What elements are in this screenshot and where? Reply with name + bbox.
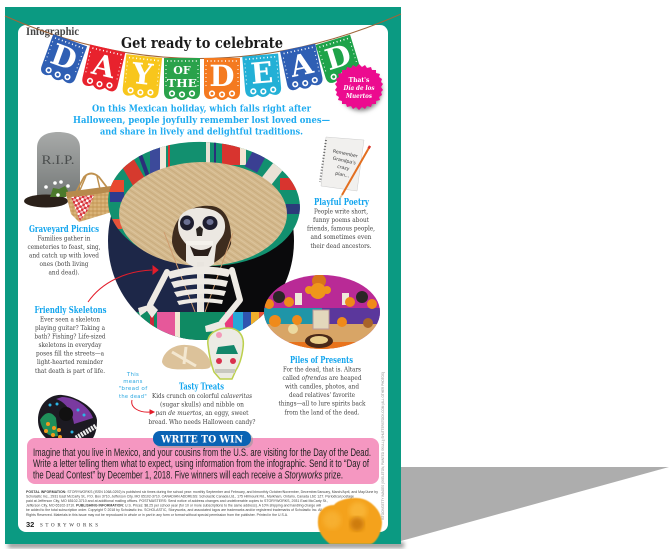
section: Graveyard Picnics: and dead).	[48, 268, 80, 276]
sombrero straw	[119, 162, 287, 266]
handwritten note: bread of the dead: "bread of	[118, 386, 148, 392]
section: Friendly Skeletons: Friendly Skeletons	[34, 306, 106, 316]
banner string	[5, 14, 401, 59]
section: Playful Poetry: friends, famous people,	[307, 224, 375, 232]
circle background	[108, 142, 294, 340]
contest box: the Dead Contest” by December 1, 2018. Five winners will each receive a Storyworks prize.	[33, 470, 343, 482]
illustration: notebook and pencil: Grandpa's	[332, 156, 357, 167]
illustration: painted sugar skull	[38, 395, 97, 445]
photo: pan de muerto bread	[162, 345, 211, 369]
flag D	[316, 35, 362, 85]
intro text: and share in lively and delightful traditions.	[100, 126, 303, 138]
badge: That's Dia de los Muertos: Muertos	[345, 93, 373, 100]
intro text: On this Mexican holiday, which falls right after	[92, 104, 312, 114]
section: Friendly Skeletons: Ever seen a skeleton	[40, 316, 101, 324]
section: Friendly Skeletons: playing guitar? Taking a	[35, 324, 105, 332]
flag E	[242, 54, 282, 98]
postal information: POSTAL INFORMATION: STORYWORKS (ISSN 1068-0292) is published six times during the school year: monthly September and February, and bimonthly October/November, December/January, March/April, and May/June by	[26, 490, 378, 494]
spine and ribs	[197, 262, 204, 312]
contest box: Write a letter telling them what to expect, using information from the infographic. Send it to “Day of	[33, 458, 369, 470]
illustration: marigold flower	[318, 498, 382, 544]
flag OF THE: THE	[167, 77, 197, 90]
section: Playful Poetry: and sometimes even	[310, 233, 372, 241]
skeleton	[138, 208, 240, 336]
section: Friendly Skeletons: that death is part of life.	[35, 367, 105, 375]
sombrero serape brim	[108, 142, 300, 266]
postal information: paid at Jefferson City, MO 65102-3710 and at additional mailing offices. POSTMASTERS: Send notice of address changes and undeliverable copies to STORYWORKS, 2931 East McCarty St.,	[26, 499, 328, 503]
basket	[76, 174, 109, 192]
photo: ofrenda altar	[264, 275, 380, 349]
postal information: Jefferson City, MO 65102-3710. PUBLISHING INFORMATION: U.S. Prices: $8.25 per school year (for 10 or more subscriptions to the same address). A 10% shipping and handling charge will	[26, 504, 321, 508]
section: Graveyard Picnics: ones (both living	[40, 260, 89, 268]
section: Tasty Treats: pan de muertos, an eggy, sweet	[156, 409, 249, 417]
section: Piles of Presents: from the land of the dead.	[284, 408, 360, 416]
flag Y	[122, 54, 162, 100]
section: Graveyard Picnics: cemeteries to feast, sing,	[28, 243, 100, 251]
flag D	[39, 34, 87, 86]
postal information: Scholastic Inc., 2931 East McCarty St., P.O. Box 3710, Jefferson City, MO 65102-3710. CANADIAN ADDRESS: Scholastic Canada Ltd., 175 Hillmount Rd., Markham, Ontario, Canada L6C 1Z7. Periodical postage	[26, 494, 354, 498]
contest box: Imagine that you live in Mexico, and your cousins from the U.S. are visiting for the Day of the Dead.	[33, 447, 371, 459]
serape blanket	[136, 312, 264, 340]
illustration: notebook and pencil: plan...	[335, 171, 350, 179]
section: Friendly Skeletons	[34, 306, 106, 375]
postal information	[26, 490, 378, 517]
folio: 32 Storyworks	[26, 520, 98, 529]
section: Friendly Skeletons: bath? Fishing? Life-sized	[34, 332, 106, 340]
postal information: Rights Reserved. Materials in this issue may not be reproduced in whole or in part in any form or format without special permission from the publisher. Printed in the U.S.A.	[26, 513, 288, 517]
badge: That's Dia de los Muertos: That's	[349, 77, 370, 84]
flag A	[81, 44, 125, 94]
illustration: tombstone and picnic basket	[24, 132, 112, 222]
flag Y: Y	[129, 56, 155, 92]
badge: That's Dia de los Muertos	[335, 64, 383, 111]
badge: That's Dia de los Muertos: Día de los	[343, 85, 375, 92]
arrow: to skeleton	[88, 266, 158, 302]
section: Friendly Skeletons: light-hearted reminder	[37, 358, 104, 366]
illustration: notebook and pencil: Remember	[332, 148, 358, 160]
illustration: tombstone and picnic basket: R.I.P.	[42, 152, 74, 167]
section: Tasty Treats	[148, 382, 256, 426]
folio: 32 Storyworks: STORYWORKS	[40, 524, 98, 528]
section: Playful Poetry: People write short,	[314, 208, 368, 216]
intro text	[73, 104, 330, 138]
section: Playful Poetry	[307, 198, 375, 250]
flag OF THE: OF	[173, 64, 191, 77]
illustration: notebook and pencil: crazy	[337, 164, 350, 172]
section: Graveyard Picnics: Graveyard Picnics	[29, 225, 99, 235]
section: Tasty Treats: bread. Who needs Halloween candy?	[148, 418, 256, 426]
flag D: D	[46, 37, 82, 77]
intro text: Halloween, people joyfully remember lost loved ones—	[73, 115, 330, 126]
arms and hands	[150, 272, 167, 305]
handwritten note: bread of the dead	[118, 372, 148, 400]
sombrero shadow under brim	[172, 206, 231, 266]
handwritten note: bread of the dead: This	[126, 372, 139, 378]
section: Graveyard Picnics	[28, 225, 100, 276]
section: Graveyard Picnics: Families gather in	[38, 234, 91, 242]
handwritten note: bread of the dead: means	[123, 379, 143, 385]
section label: Infographic: Infographic	[26, 26, 79, 38]
flag D	[204, 58, 240, 100]
handwritten note: bread of the dead: the dead"	[119, 394, 147, 400]
section: Piles of Presents: things—all to lure spirits back	[278, 400, 366, 408]
section: Piles of Presents: Piles of Presents	[290, 356, 353, 366]
flag A	[280, 44, 324, 92]
grey drop shadow wedge	[401, 467, 669, 541]
section: Tasty Treats: Tasty Treats	[179, 382, 224, 392]
section: Tasty Treats: Kids crunch on colorful calaveritas	[152, 392, 253, 400]
flag OF THE	[164, 58, 200, 100]
tombstone	[37, 132, 80, 197]
teal page border	[5, 7, 401, 544]
contest box	[27, 438, 379, 484]
skull	[178, 208, 225, 269]
section: Piles of Presents: with candles, photos, and	[285, 382, 360, 390]
papel picado banner: DAY OF THE DEAD	[39, 34, 362, 100]
pencil	[342, 146, 370, 195]
arrow: to pan de muertos	[132, 400, 154, 414]
photo: sugar skull	[208, 328, 243, 379]
white page panel	[18, 25, 388, 532]
section: Playful Poetry: Playful Poetry	[314, 198, 370, 208]
section: Piles of Presents	[278, 356, 366, 416]
flag A: A	[286, 46, 316, 84]
folio: 32 Storyworks: 32	[26, 520, 34, 529]
flag A: A	[88, 47, 119, 85]
section: Friendly Skeletons: poses fill the streets—a	[36, 350, 104, 358]
flag D: D	[321, 37, 355, 77]
flag E: E	[249, 55, 274, 91]
postal information: be added to the total subscription order. Copyright © 2018 by Scholastic Inc. SCHOLASTIC, Storyworks, and associated logos are trademarks and/or registered trademarks of Scholastic Inc. All	[26, 508, 322, 512]
cords	[164, 232, 233, 312]
photo credit: ISTOCK/GETTY IMAGES (SKELETON, PAINTED SKULL); SHUTTERSTOCK.COM (ALL OTHER PHOTOS)	[381, 371, 385, 520]
photo: skeleton in sombrero	[108, 142, 300, 340]
section: Playful Poetry: their dead ancestors.	[310, 242, 372, 250]
section: Graveyard Picnics: and catch up with loved	[29, 252, 100, 260]
section: Piles of Presents: For the dead, that is. Altars	[283, 366, 362, 374]
write to win pill	[153, 431, 253, 448]
page bottom shadow	[8, 542, 404, 548]
flag D: D	[209, 59, 235, 93]
section: Friendly Skeletons: skeletons in everyday	[38, 341, 102, 349]
section: Playful Poetry: funny poems about	[313, 216, 369, 224]
section: Tasty Treats: (sugar skulls) and nibble on	[160, 400, 245, 408]
illustration: notebook and pencil	[320, 137, 370, 198]
title: Get ready to celebrate: Get ready to celebrate	[121, 34, 283, 52]
section: Piles of Presents: called ofrendas are heaped	[282, 374, 362, 382]
section: Piles of Presents: dead relatives' favorite	[289, 391, 355, 399]
write to win pill: WRITE TO WIN	[160, 434, 243, 446]
